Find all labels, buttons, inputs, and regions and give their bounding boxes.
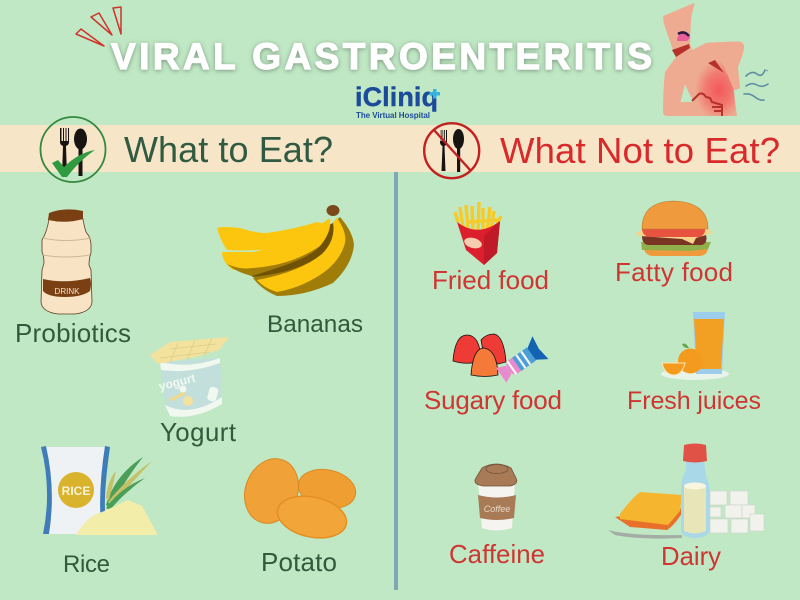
- vertical divider: [394, 172, 398, 590]
- label: Probiotics: [15, 318, 131, 348]
- item: bananas: [217, 205, 363, 338]
- label: Fresh juices: [627, 387, 761, 415]
- item: yogurt: [150, 337, 236, 447]
- label: Bananas: [267, 311, 363, 338]
- logo: iCliniq: The Virtual Hospital: [356, 111, 430, 120]
- icon: french fries: [455, 202, 501, 265]
- item: fried food: [432, 202, 549, 295]
- label: Rice: [63, 551, 110, 578]
- icon: fork and spoon with check: [40, 117, 106, 182]
- item: probiotics: [15, 209, 131, 348]
- section band: [0, 125, 800, 172]
- logo: iCliniq: iCliniq: [355, 82, 438, 112]
- heading: what not to eat: What Not to Eat?: [500, 130, 780, 171]
- label: Sugary food: [424, 385, 562, 415]
- item: fatty food: [615, 201, 733, 287]
- item: dairy: [608, 444, 764, 571]
- icon: probiotic drink: DRINK: [55, 287, 80, 296]
- label: Fatty food: [615, 257, 733, 287]
- item: caffeine: [449, 464, 545, 569]
- icon: yogurt cup: yogurt: [157, 371, 197, 393]
- label: Potato: [261, 547, 337, 577]
- title: VIRAL GASTROENTERITIS: [111, 36, 652, 77]
- icon: bananas: [217, 205, 354, 296]
- label: Dairy: [661, 543, 721, 571]
- item: sugary food: [424, 334, 562, 415]
- icon: burger: [635, 201, 713, 256]
- label: Yogurt: [160, 419, 236, 447]
- label: Caffeine: [449, 541, 545, 569]
- illustration: person with stomach pain: [663, 3, 768, 120]
- panel: what to eat: [15, 205, 363, 578]
- item: potato: [236, 451, 359, 577]
- icon: rice bag: RICE: [62, 484, 90, 498]
- heading: what to eat: What to Eat?: [124, 129, 333, 170]
- icon: potatoes: [236, 451, 359, 544]
- icon: butter, milk and cubes: [608, 444, 764, 539]
- icon: coffee cup: Coffee: [484, 504, 510, 514]
- icon: orange juice: [661, 312, 729, 380]
- label: Fried food: [432, 265, 549, 295]
- item: fresh juices: [627, 312, 761, 415]
- title accent marks: [76, 7, 121, 46]
- icon: candies: [453, 334, 549, 387]
- panel: what not to eat: [424, 201, 764, 571]
- icon: no fork and spoon: [424, 123, 479, 178]
- item: rice: [41, 446, 158, 578]
